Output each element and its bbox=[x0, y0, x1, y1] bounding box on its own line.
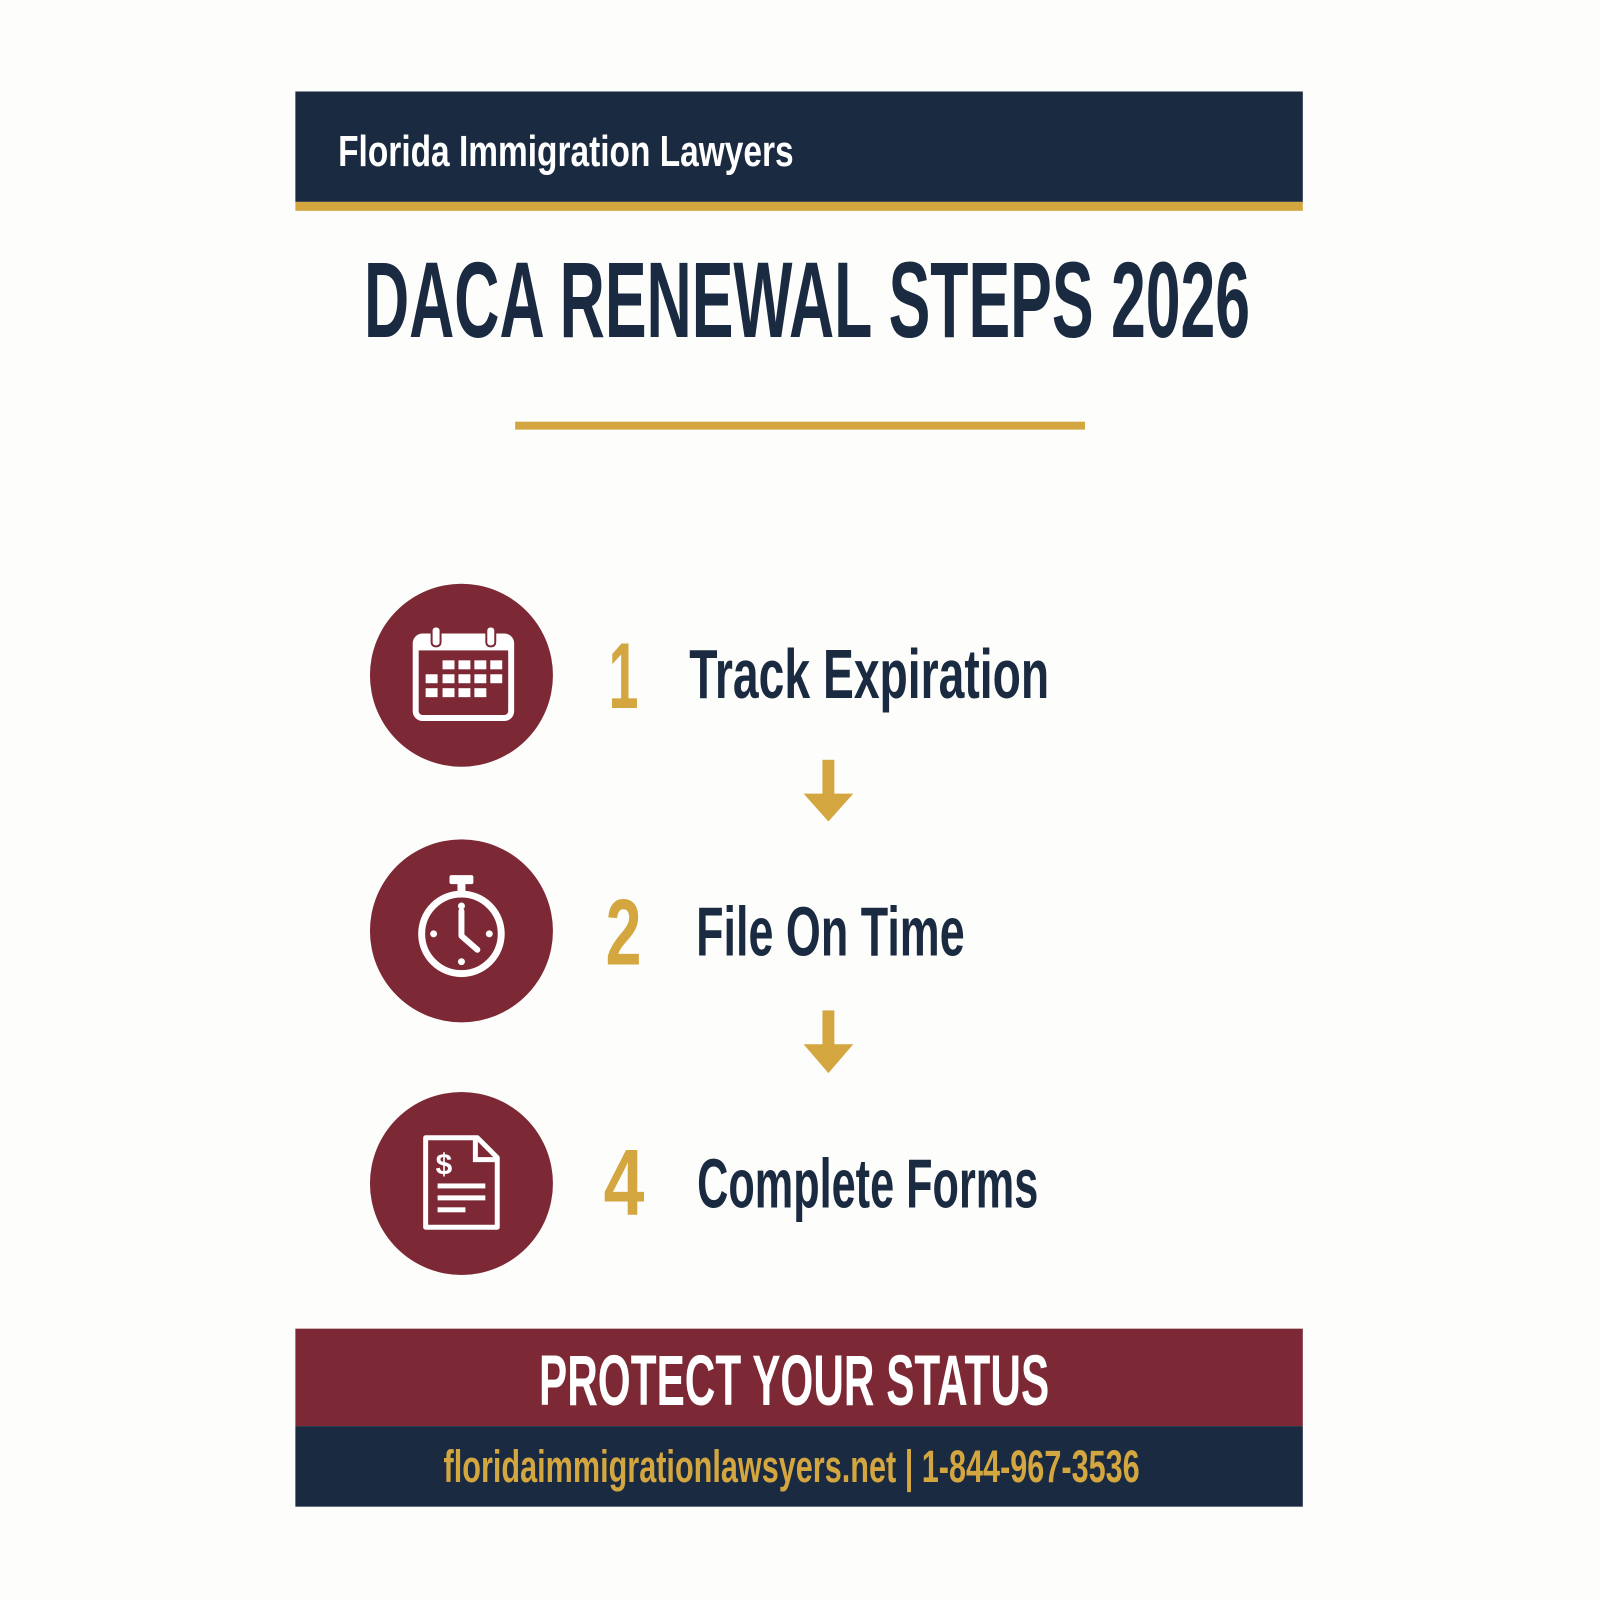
footer headline: PROTECT YOUR STATUS bbox=[539, 1341, 1049, 1421]
icon: stopwatch bbox=[370, 839, 553, 1022]
step number 1: 1 bbox=[609, 623, 638, 728]
icon: fee document: $ bbox=[436, 1149, 453, 1182]
step label: Track Expiration: Track Expiration bbox=[689, 635, 1049, 713]
step label: Complete Forms: Complete Forms bbox=[697, 1144, 1038, 1222]
arrow down 2 bbox=[804, 1010, 853, 1073]
footer banner bbox=[295, 1329, 1303, 1507]
step 1 bbox=[370, 584, 1049, 767]
step label: File On Time: File On Time bbox=[696, 893, 965, 971]
gold divider under title bbox=[515, 422, 1085, 430]
arrow down 1 bbox=[804, 760, 853, 821]
step number 4: 4 bbox=[604, 1129, 644, 1234]
step number 2: 2 bbox=[606, 880, 641, 985]
header text: firm name: Florida Immigration Lawyers bbox=[338, 127, 794, 176]
icon: calendar bbox=[370, 584, 553, 767]
footer contact: floridaimmigrationlawsyers.net | 1-844-967-3536 bbox=[444, 1441, 1140, 1492]
header bar bbox=[295, 91, 1303, 211]
step 2 bbox=[370, 839, 965, 1022]
icon: fee document bbox=[370, 1092, 553, 1275]
step 3 bbox=[370, 1092, 1038, 1275]
